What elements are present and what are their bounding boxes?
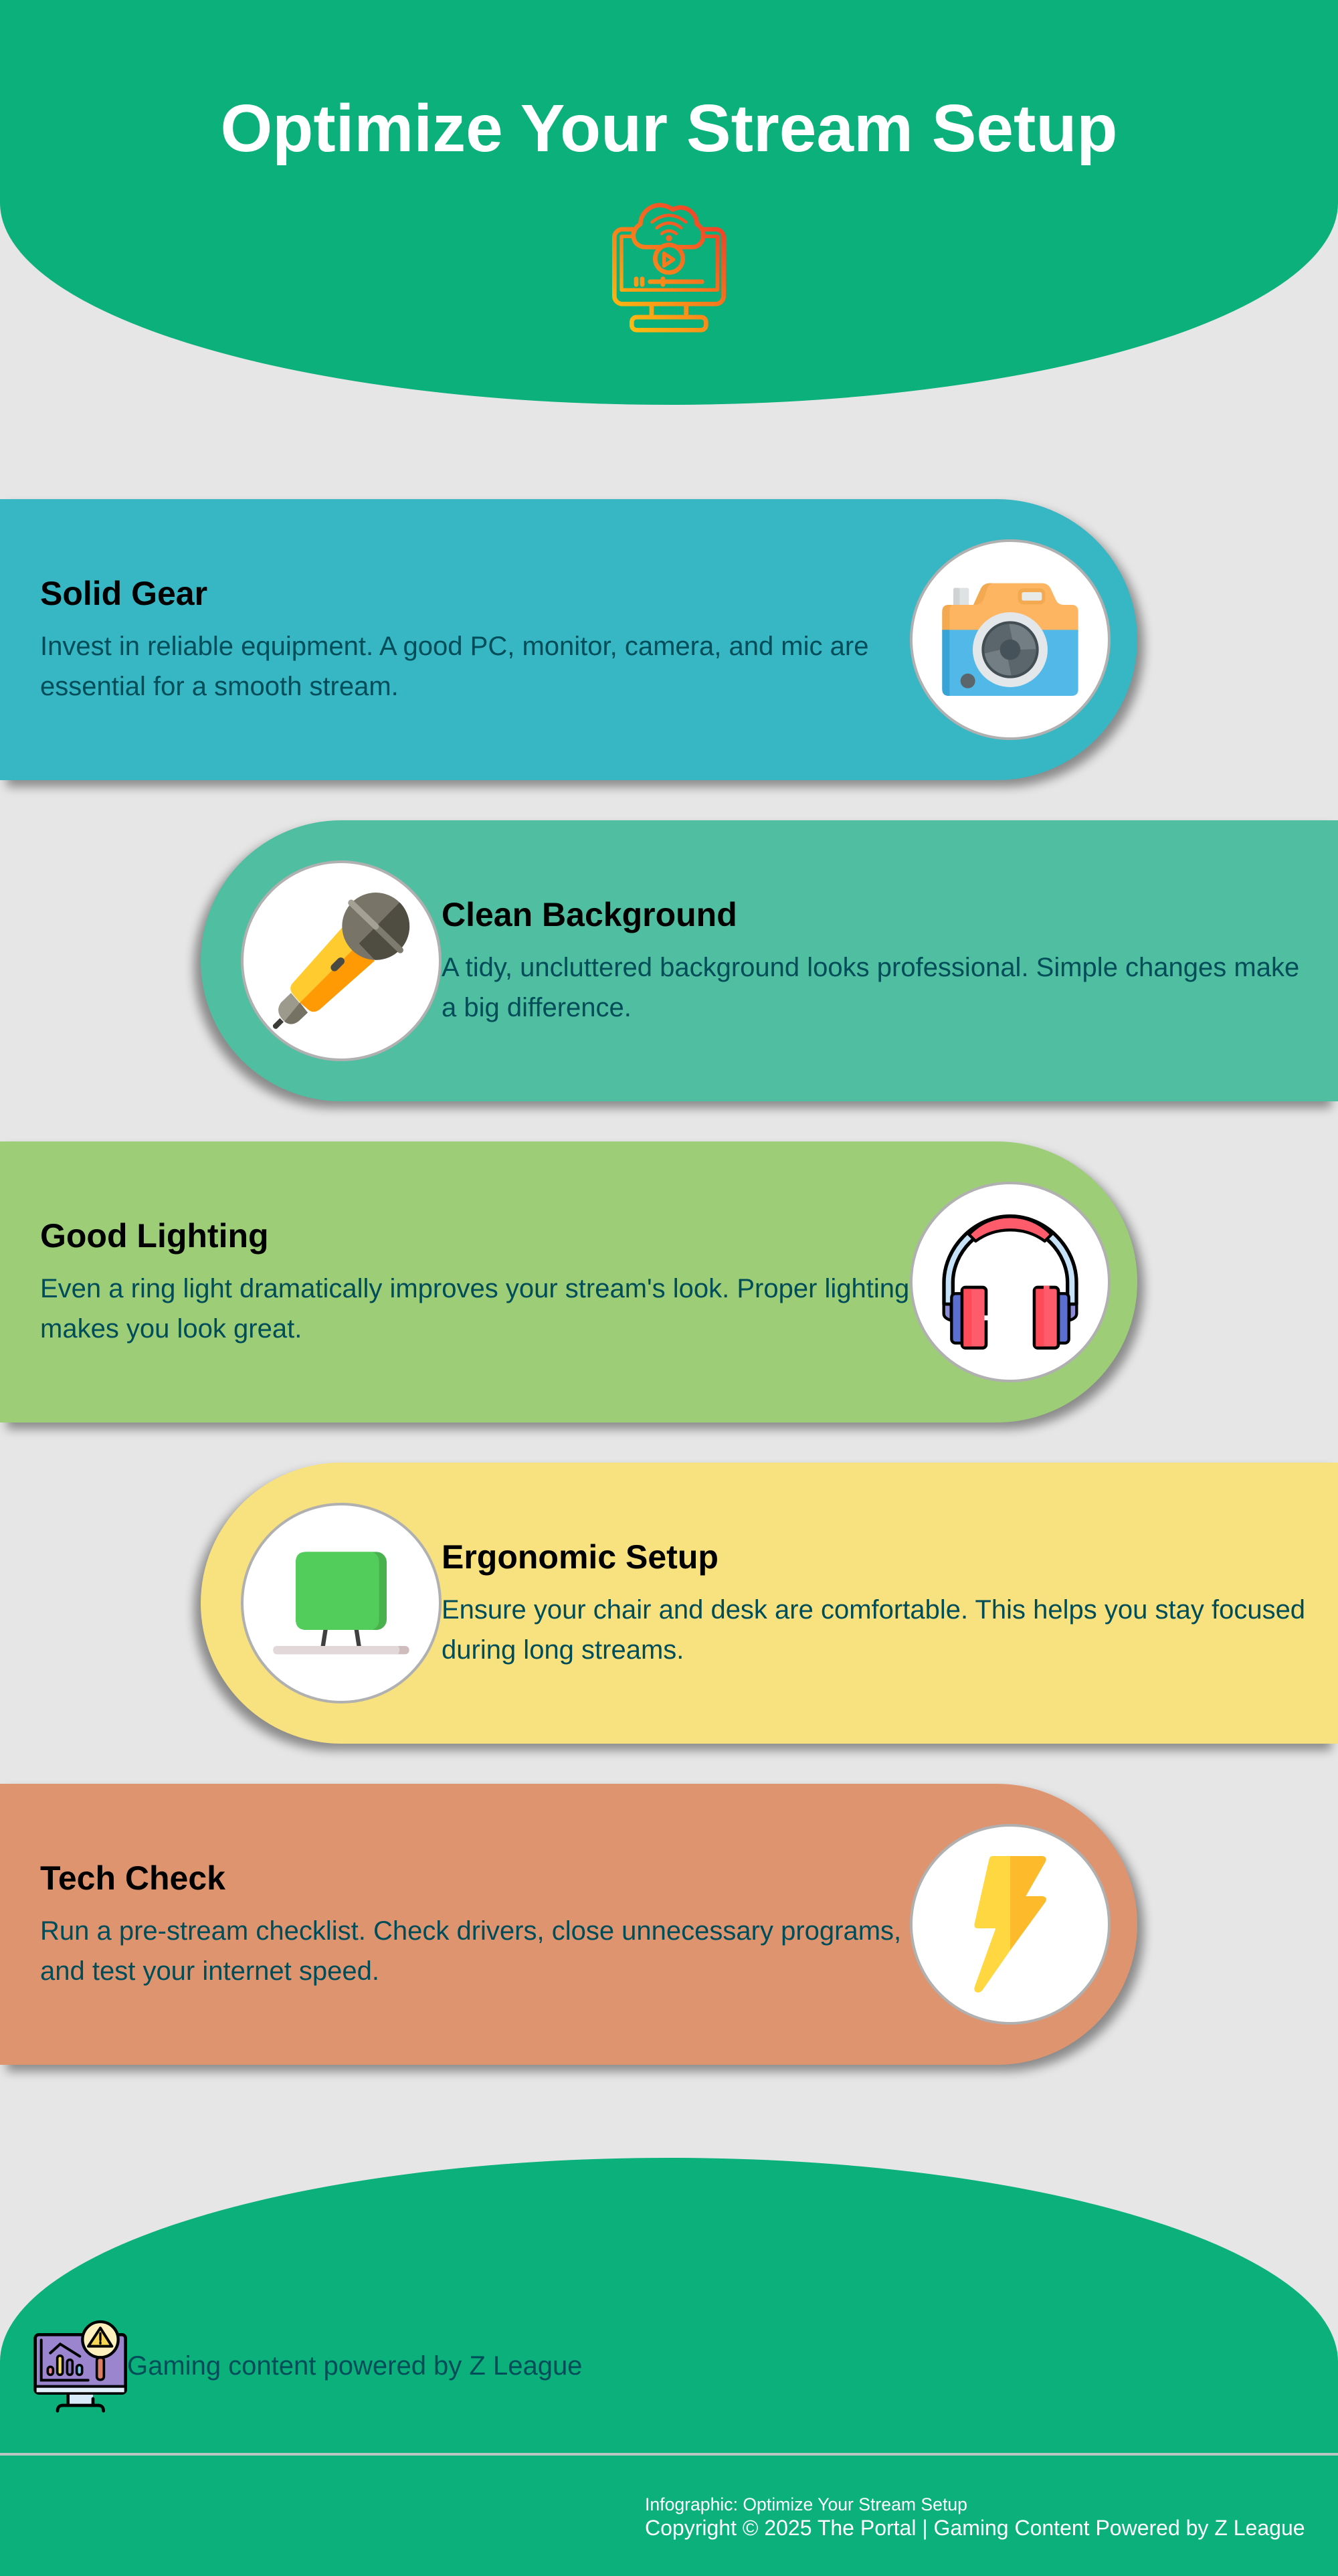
panel: Solid Gear xyxy=(0,499,1137,780)
icon: green screen xyxy=(241,1503,442,1704)
text: Clean Background: a big difference. xyxy=(442,993,632,1022)
text: Clean Background xyxy=(442,896,1299,1022)
text: Ergonomic Setup xyxy=(442,1538,1305,1665)
text: Tech Check: Run a pre-stream checklist. Check drivers, close unnecessary programs, xyxy=(40,1916,901,1946)
footer credits: Copyright © 2025 The Portal | Gaming Content Powered by Z League xyxy=(645,2516,1305,2540)
text: Solid Gear xyxy=(40,575,868,701)
text: Ergonomic Setup: during long streams. xyxy=(442,1635,684,1665)
text: Solid Gear: Invest in reliable equipment. A good PC, monitor, camera, and mic are xyxy=(40,632,868,661)
icon: cloud streaming monitor xyxy=(612,203,726,333)
text: Ergonomic Setup: Ergonomic Setup xyxy=(442,1538,719,1576)
icon: lightning bolt xyxy=(910,1824,1111,2025)
text: Good Lighting: Good Lighting xyxy=(40,1217,269,1255)
panel: Ergonomic Setup xyxy=(201,1463,1338,1744)
footer divider xyxy=(0,2453,1338,2456)
text: Good Lighting xyxy=(40,1217,909,1344)
panel: Clean Background xyxy=(201,820,1338,1101)
icon: monitor with warning magnifier xyxy=(33,2320,127,2413)
footer band xyxy=(0,2158,1338,2576)
text: Solid Gear: Solid Gear xyxy=(40,575,207,612)
footer credits: Infographic: Optimize Your Stream Setup xyxy=(645,2494,967,2514)
icon: camera xyxy=(910,539,1111,740)
text: Clean Background: A tidy, uncluttered background looks professional. Simple changes make xyxy=(442,953,1299,982)
icon: microphone xyxy=(241,860,442,1061)
title: Optimize Your Stream Setup xyxy=(220,91,1117,166)
icon: headphones xyxy=(910,1182,1111,1382)
footer credits xyxy=(645,2494,1305,2540)
footer tagline: Gaming content powered by Z League xyxy=(127,2351,582,2381)
panel: Tech Check xyxy=(0,1784,1137,2065)
text: Tech Check xyxy=(40,1859,901,1986)
text: Tech Check: and test your internet speed. xyxy=(40,1956,379,1986)
header band xyxy=(0,0,1338,405)
text: Tech Check: Tech Check xyxy=(40,1859,225,1897)
panel: Good Lighting xyxy=(0,1141,1137,1422)
text: Ergonomic Setup: Ensure your chair and desk are comfortable. This helps you stay focused xyxy=(442,1595,1305,1625)
text: Clean Background: Clean Background xyxy=(442,896,737,933)
text: Good Lighting: Even a ring light dramatically improves your stream's look. Proper lighting xyxy=(40,1274,909,1303)
text: Good Lighting: makes you look great. xyxy=(40,1314,302,1344)
text: Solid Gear: essential for a smooth stream. xyxy=(40,672,399,701)
